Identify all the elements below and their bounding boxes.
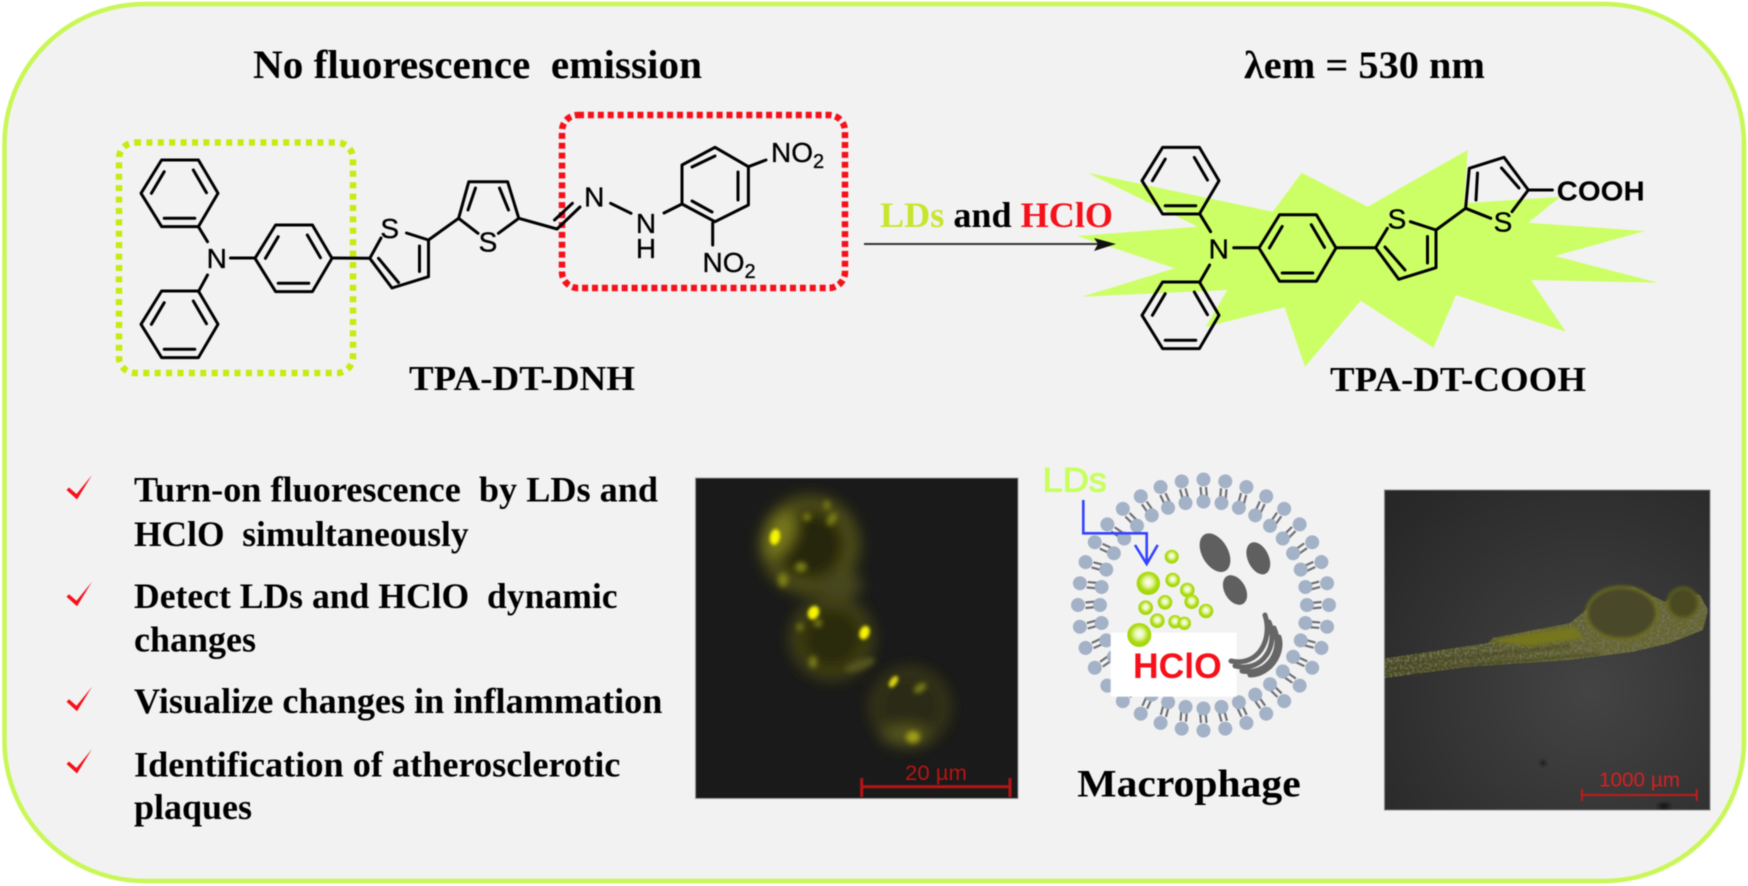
burst: fluorescence star [1077, 150, 1658, 367]
label: Macrophage: Macrophage [1077, 763, 1301, 806]
atom labels: TPA-DT-DNH: N [636, 208, 656, 239]
atom labels: TPA-DT-DNH: 2 [744, 261, 756, 283]
bullet text 3: Visualize changes in inflammation [134, 681, 662, 721]
atom labels: TPA-DT-COOH: N [1209, 234, 1229, 264]
atom labels: TPA-DT-DNH: N [207, 243, 227, 274]
micrograph: cells [696, 478, 1018, 798]
bullet text 1: Turn-on fluorescence by LDs and [134, 470, 658, 510]
compound name: TPA-DT-DNH: TPA-DT-DNH [409, 359, 635, 398]
scale bar: 1000 µm [1582, 770, 1697, 801]
white HClO label box [1111, 633, 1237, 697]
atom labels: TPA-DT-DNH: N [584, 182, 604, 212]
label: HClO: HClO [1133, 647, 1222, 686]
icon: check mark 4 [66, 749, 92, 774]
bullet text 4: Identification of atherosclerotic [134, 745, 620, 785]
atom labels: TPA-DT-DNH: NO [702, 247, 744, 278]
icon: check mark 2 [66, 582, 92, 606]
macrophage diagram [1043, 462, 1336, 806]
arrow: reaction [864, 238, 1116, 251]
scale bar: 20 µm [862, 762, 1010, 797]
bullet text 2 [134, 576, 618, 660]
heading: emission wavelength: λem = 530 nm [1244, 44, 1485, 87]
highlight box: triphenylamine group [119, 142, 353, 373]
atom labels: TPA-DT-COOH: S [1388, 204, 1406, 234]
highlight box: dinitrophenylhydrazine group [562, 115, 845, 288]
heading: no fluorescence emission: No fluorescence emission [253, 42, 702, 87]
lipid membrane [1071, 472, 1336, 738]
bullet text 1 [134, 470, 658, 554]
bullet text 1: HClO simultaneously [134, 514, 469, 554]
molecule: TPA-DT-DNH [141, 147, 766, 358]
bullet text 4 [134, 745, 620, 827]
icon: check mark 3 [66, 687, 92, 711]
arrow: LDs entering [1083, 500, 1158, 564]
scale bar: 20 µm: 20 µm [905, 762, 967, 785]
icon: check mark 1 [66, 475, 92, 500]
compound name: TPA-DT-COOH: TPA-DT-COOH [1330, 360, 1586, 399]
label: LDs: LDs [1043, 462, 1107, 500]
atom labels: TPA-DT-DNH: H [636, 233, 656, 264]
bullet text 2: changes [134, 620, 256, 660]
molecule: TPA-DT-COOH [1142, 147, 1552, 349]
fish body [1385, 587, 1708, 809]
bullet text 4: plaques [134, 787, 252, 827]
atom labels: TPA-DT-DNH: 2 [813, 151, 824, 173]
atom labels: TPA-DT-DNH: NO [771, 137, 813, 168]
atom labels: TPA-DT-COOH: S [1494, 206, 1512, 238]
atom labels: TPA-DT-DNH: S [479, 226, 497, 258]
micrograph: zebrafish [1384, 490, 1710, 810]
atom labels: TPA-DT-COOH: COOH [1557, 176, 1645, 207]
reaction label: LDs and HClO: LDs and HClO [880, 195, 1113, 235]
bullet text 2: Detect LDs and HClO dynamic [134, 576, 618, 616]
lipid droplets [1127, 550, 1213, 647]
organelles [1193, 528, 1280, 675]
atom labels: TPA-DT-COOH [1209, 176, 1645, 264]
scale bar: 1000 µm: 1000 µm [1599, 770, 1680, 792]
bullet list: features [66, 470, 662, 827]
atom labels: TPA-DT-DNH: S [380, 213, 399, 244]
atom labels: TPA-DT-DNH [207, 137, 824, 283]
